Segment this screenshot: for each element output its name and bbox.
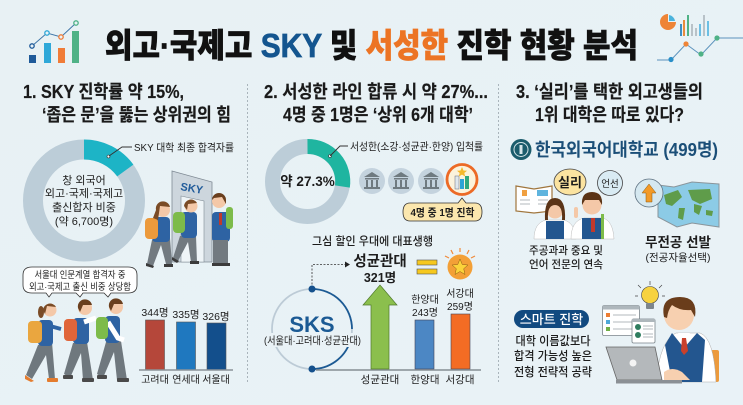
illustration: student at laptop with windows and bulb (602, 281, 719, 384)
bar chart: SKY admits: 고려대 (141, 374, 169, 386)
icon: highlighted top university (447, 164, 477, 194)
subheading: SKS: 그심 할인 우대에 대표생행 (312, 234, 433, 248)
illustration: book and students: 언선 (601, 178, 619, 190)
donut chart: SKY share: 창 외국어 (62, 174, 106, 187)
bar chart: SKY admits: 335명 (172, 309, 200, 321)
title: 외고·국제고 SKY 및 서성한 진학 현황 분석 (105, 27, 638, 64)
donut chart: SKY share (33, 149, 135, 252)
bar chart: Seoseonghan admits: 성균관대 (361, 374, 399, 386)
bar chart: SKY admits (139, 307, 233, 386)
bar chart: Seoseonghan admits: 243명 (412, 307, 438, 319)
illustration: students entering SKY gate (145, 171, 233, 268)
icon: title chart right (657, 14, 743, 62)
bar chart: SKY admits: 344명 (141, 307, 169, 319)
panel: SKY rate (23, 82, 234, 386)
text: undeclared major (645, 235, 712, 264)
panel: Seoseonghan line (262, 82, 488, 386)
panel: HUFS (510, 82, 719, 384)
heading: section 3 (516, 82, 703, 125)
text: major importance: 언어 전문의 연속 (529, 258, 603, 271)
icons: three university buildings (359, 168, 444, 194)
arrow: dashed to Sungkyunkwan (312, 262, 350, 288)
text: undeclared major: (전공자율선택) (646, 252, 710, 264)
callout: SKY final rate (107, 141, 234, 158)
heading: section 2: 2. 서성한 라인 합류 시 약 27%... (264, 82, 488, 102)
illustration: three walking students (25, 298, 129, 382)
callout: SKY final rate: SKY 대학 최종 합격자률 (134, 141, 234, 154)
label: Sungkyunkwan 321 (353, 253, 407, 285)
illustration: book and students: 실리 (558, 175, 582, 190)
heading: HUFS 499: 한국외국어대학교 (499명) (535, 140, 718, 160)
donut chart: 27.3% (272, 146, 343, 216)
illustration: book and students (516, 169, 622, 239)
diagram: SKS ring (262, 286, 362, 372)
text: smart admission detail: 대학 이름값보다 (516, 333, 590, 348)
bar chart: Seoseonghan admits (316, 285, 481, 386)
callout: enrollment rate: 서성한(소강·성균관·한양) 입척률 (350, 140, 483, 153)
bar chart: SKY admits: 연세대 (172, 374, 200, 386)
text: major importance (529, 244, 603, 271)
heading: section 2: 4명 중 1명은 ‘상위 6개 대학’ (283, 105, 473, 125)
badge: 1 in 4: 4명 중 1명 진학 (410, 206, 475, 219)
bar chart: Seoseonghan admits: 한양대 (411, 294, 439, 306)
heading: section 3: 3. ‘실리’를 택한 외고생들의 (516, 82, 703, 102)
label: Sungkyunkwan 321: 321명 (364, 271, 396, 285)
heading: section 1: 1. SKY 진학률 약 15%, (23, 82, 184, 102)
icon: title chart left (29, 21, 79, 63)
icon: equals sign (417, 260, 437, 274)
text: major importance: 주공과과 중요 및 (529, 244, 603, 257)
label: Sungkyunkwan 321: 성균관대 (353, 253, 407, 270)
illustration: world map and arrow (635, 179, 719, 227)
donut chart: SKY share: 출신합자 비중 (52, 201, 116, 214)
text: smart admission detail: 전형 전략적 공략 (514, 364, 592, 379)
icon: star medal (445, 248, 475, 280)
speech bubble: humanities share: 서울대 인문계열 합격자 중 (34, 269, 126, 281)
illustration: students entering SKY gate: SKY (179, 181, 204, 197)
diagram: SKS ring: (서울대·고려대·성균관대) (264, 335, 361, 347)
text: smart admission detail: 합격 가능성 높은 (514, 348, 592, 363)
donut chart: 27.3%: 약 27.3% (280, 174, 335, 189)
heading: section 3: 1위 대학은 따로 있다? (535, 105, 684, 125)
badge: smart admission: 스마트 진학 (520, 312, 583, 327)
donut chart: SKY share: 외고·국제·국제고 (45, 187, 123, 200)
text: undeclared major: 무전공 선발 (645, 235, 712, 250)
heading: section 1: ‘좁은 문’을 뚫는 상위권의 힘 (42, 105, 231, 125)
speech bubble: humanities share (23, 267, 137, 297)
bar chart: Seoseonghan admits: 서강대 (446, 288, 474, 300)
callout: enrollment rate (328, 140, 483, 158)
heading: section 1 (23, 82, 231, 125)
badge: 1 in 4 (403, 198, 482, 221)
text: smart admission detail (514, 333, 592, 379)
bar chart: SKY admits: 326명 (202, 311, 230, 323)
diagram: SKS ring: SKS (289, 312, 335, 337)
bar chart: Seoseonghan admits: 한양대 (411, 374, 439, 386)
speech bubble: humanities share: 외고·국제고 출신 비중 상당함 (29, 281, 131, 293)
heading: section 2 (264, 82, 488, 125)
bar chart: SKY admits: 서울대 (202, 374, 230, 386)
donut chart: SKY share: (약 6,700명) (55, 214, 113, 228)
bar chart: Seoseonghan admits: 259명 (447, 301, 473, 313)
bar chart: Seoseonghan admits: 서강대 (446, 374, 474, 386)
icon: university seal (510, 139, 532, 160)
